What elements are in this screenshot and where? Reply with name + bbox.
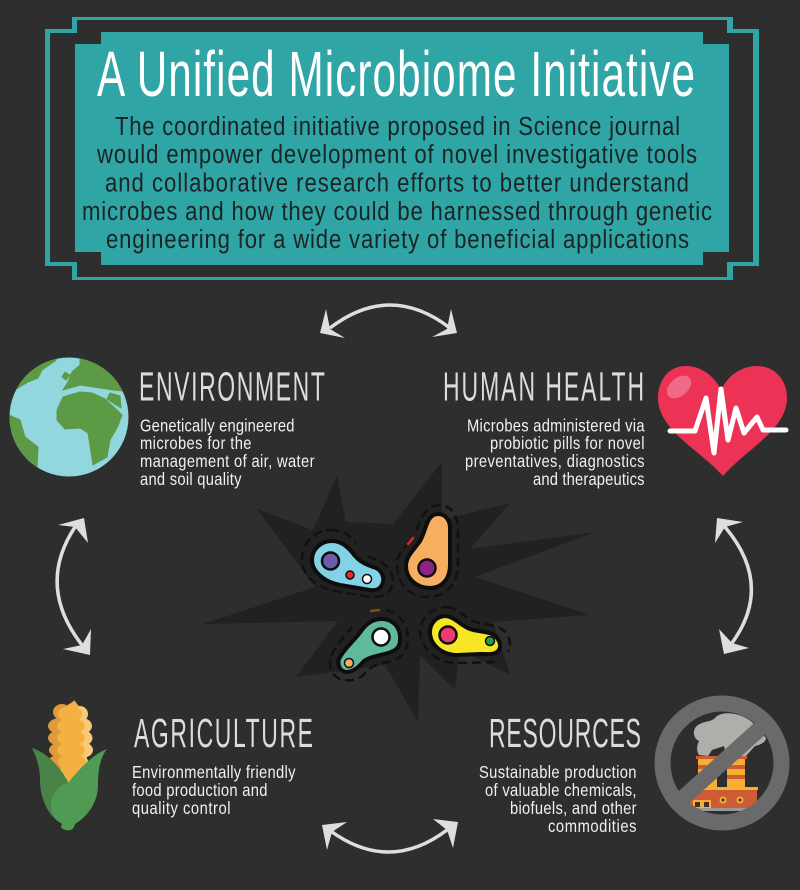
text: agriculture description: Environmentally friendly: [132, 763, 296, 782]
intro text: microbes and how they could be harnessed through genetic: [82, 197, 712, 226]
text: environment description: management of air, water: [140, 452, 315, 471]
text: environment description: microbes for the: [140, 434, 252, 453]
arrow: right double arrow: [715, 518, 751, 654]
starburst: [203, 462, 595, 722]
text: environment description: and soil quality: [140, 470, 242, 489]
microbe: orange: [397, 505, 458, 597]
text: human health description: [465, 416, 645, 489]
intro text: and collaborative research efforts to better understand: [105, 169, 689, 198]
intro text: would empower development of novel investigative tools: [96, 140, 697, 169]
section: environment: [139, 365, 325, 489]
text: agriculture description: [132, 763, 296, 818]
arrow: top double arrow: [320, 305, 457, 338]
heading: human health: HUMAN HEALTH: [443, 365, 644, 410]
section: agriculture: [132, 711, 313, 818]
heading: resources: RESOURCES: [489, 711, 641, 757]
intro text: The coordinated initiative proposed in Science journal: [115, 112, 680, 141]
section: resources: [479, 711, 641, 836]
icon: crossed-out factory: [662, 704, 782, 822]
icon: corn: [32, 700, 107, 830]
text: resources description: [479, 763, 637, 836]
header frame: [45, 17, 759, 280]
panel: header: [75, 32, 729, 265]
microbe: green: [330, 610, 408, 680]
text: resources description: biofuels, and other: [510, 799, 637, 818]
text: resources description: of valuable chemicals,: [485, 781, 637, 800]
text: environment description: [140, 416, 315, 489]
arrow: left double arrow: [57, 518, 91, 655]
intro text: [82, 112, 712, 254]
section: human health: [443, 365, 645, 489]
text: human health description: Microbes administered via: [467, 416, 645, 436]
microbe: blue: [302, 530, 393, 597]
icon: globe: [10, 358, 128, 476]
text: resources description: Sustainable production: [479, 763, 637, 782]
text: resources description: commodities: [548, 817, 636, 836]
heading: environment: ENVIRONMENT: [139, 365, 325, 410]
text: environment description: Genetically engineered: [140, 416, 294, 436]
intro text: engineering for a wide variety of beneficial applications: [106, 225, 689, 254]
arrow: bottom double arrow: [322, 819, 458, 852]
title: A Unified Microbiome Initiative: [97, 39, 695, 110]
heading: agriculture: AGRICULTURE: [134, 711, 313, 757]
text: agriculture description: food production and: [132, 781, 267, 800]
text: human health description: and therapeutics: [533, 470, 645, 489]
microbe: yellow: [420, 607, 510, 663]
text: agriculture description: quality control: [132, 799, 230, 818]
text: human health description: probiotic pills for novel: [490, 434, 644, 453]
text: human health description: preventatives, diagnostics: [465, 452, 644, 471]
icon: heart with pulse: [658, 366, 787, 476]
